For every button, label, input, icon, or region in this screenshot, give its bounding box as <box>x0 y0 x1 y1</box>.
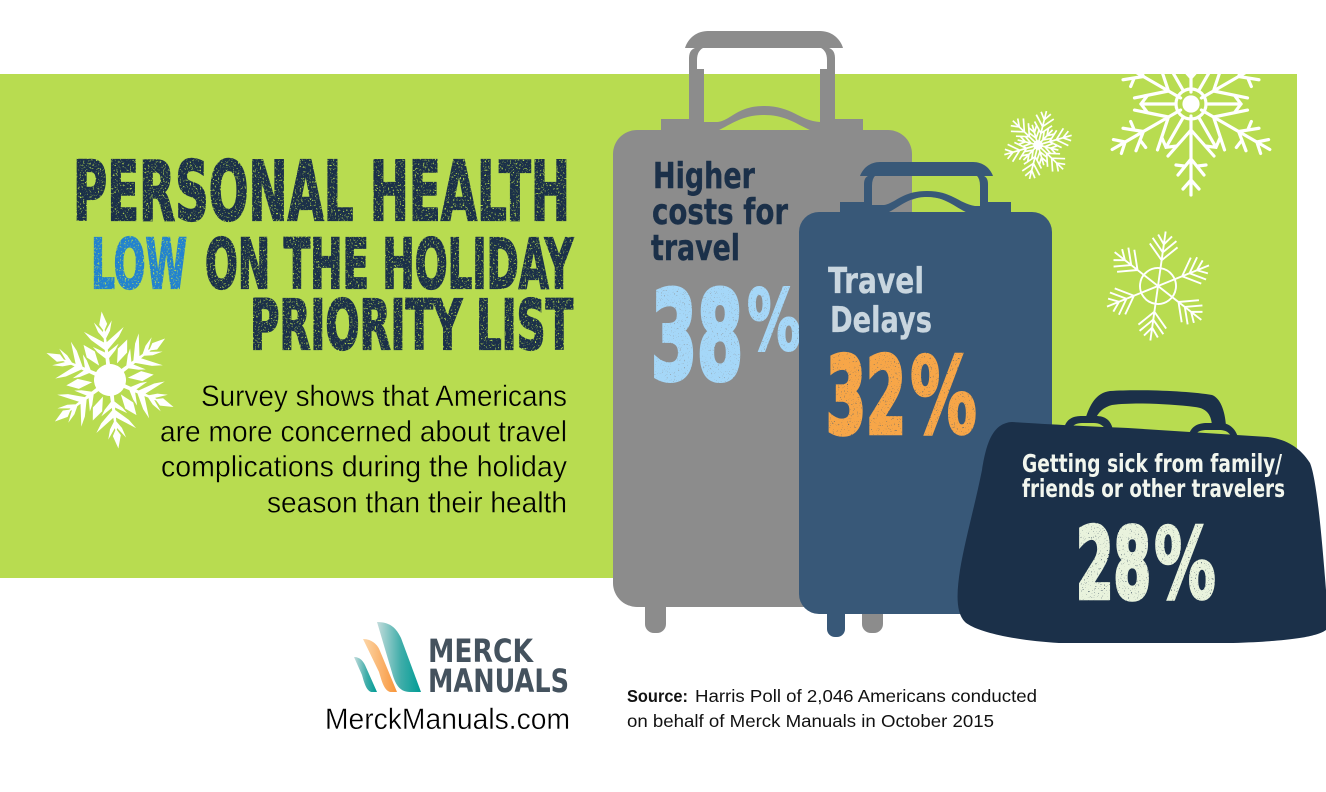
title: LOW <box>91 225 187 305</box>
blue suitcase <box>799 162 1052 637</box>
intro text <box>160 380 567 520</box>
snowflake large <box>1101 13 1281 195</box>
title: ON THE HOLIDAY <box>205 225 574 305</box>
logo: Merck Manuals <box>325 622 570 736</box>
website: MerckManuals.com <box>325 703 570 736</box>
stat 32%: 32 <box>826 335 906 458</box>
bag shape <box>958 390 1326 643</box>
stat 38%: 38 <box>651 266 743 408</box>
logo wordmark: MANUALS <box>428 662 569 700</box>
source note: Source: <box>627 686 688 706</box>
title: PERSONAL HEALTH <box>73 145 570 240</box>
label: higher costs for travel: costs for <box>652 192 788 233</box>
intro text: Survey shows that Americans <box>201 380 567 413</box>
intro text: season than their health <box>267 486 567 520</box>
grey suitcase shape <box>613 31 912 633</box>
title: PRIORITY LIST <box>250 286 573 366</box>
logo wordmark: MERCK <box>428 632 534 670</box>
dark travel bag <box>958 390 1326 643</box>
label: higher costs for travel <box>651 156 788 269</box>
stat 38%: % <box>747 272 801 371</box>
source note <box>627 686 1037 731</box>
stat 28%: 28 <box>1076 508 1151 622</box>
title <box>73 145 574 366</box>
snowflake left <box>29 303 191 457</box>
green background band <box>0 74 1297 578</box>
blue suitcase shape <box>799 162 1052 637</box>
grey suitcase <box>613 31 912 633</box>
intro text: are more concerned about travel <box>160 416 567 448</box>
snowflake small <box>993 102 1083 188</box>
label: travel delays <box>828 261 932 341</box>
label: higher costs for travel: travel <box>651 228 740 269</box>
label: higher costs for travel: Higher <box>653 156 755 197</box>
stat 32%: % <box>910 335 977 458</box>
label: travel delays: Delays <box>830 300 932 341</box>
intro text: complications during the holiday <box>161 450 567 484</box>
stat 28%: % <box>1154 508 1216 622</box>
logo wordmark <box>428 632 569 700</box>
label: travel delays: Travel <box>828 261 924 302</box>
source note: Harris Poll of 2,046 Americans conducted <box>695 686 1037 706</box>
logo mark <box>354 622 421 692</box>
snowflake medium <box>1096 224 1220 348</box>
source note: on behalf of Merck Manuals in October 2015 <box>627 711 994 731</box>
label: getting sick <box>1022 449 1285 503</box>
